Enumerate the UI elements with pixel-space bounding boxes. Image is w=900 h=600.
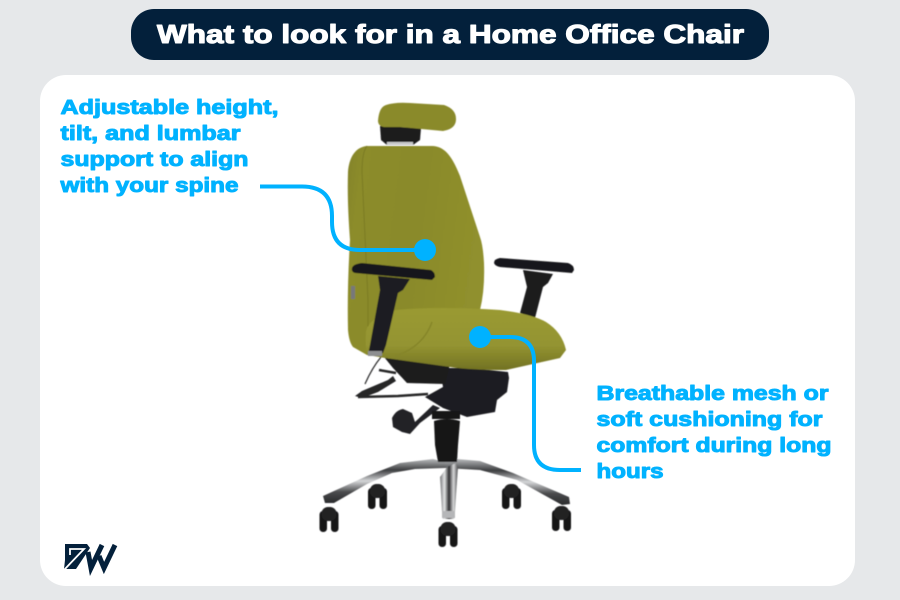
panel: chair card (40, 75, 855, 586)
title (131, 9, 769, 60)
text block: breathable comfort: comfort during long (596, 434, 832, 457)
text block: adjustable support: Adjustable height, (60, 96, 278, 119)
title: What to look for in a Home Office Chair (157, 19, 744, 49)
icon: seat mechanism (355, 352, 509, 434)
text block: adjustable support (59, 96, 279, 197)
icon: seat cushion (366, 308, 566, 370)
icon: far armrest (494, 258, 574, 318)
text block: breathable comfort: Breathable mesh or (596, 382, 829, 405)
icon: gas cylinder (434, 419, 460, 462)
text block: breathable comfort: soft cushioning for (596, 408, 823, 431)
icon: backrest (348, 146, 484, 355)
text block: adjustable support: tilt, and lumbar (60, 122, 241, 145)
text block: breathable comfort: hours (596, 460, 664, 483)
icon: headrest (378, 103, 456, 145)
text block: breathable comfort (596, 382, 832, 483)
chair photo illustration (320, 103, 574, 547)
icon: near armrest (351, 263, 435, 356)
icon: chair base (320, 459, 571, 547)
icon: logo (64, 544, 115, 570)
text block: adjustable support: with your spine (59, 174, 239, 197)
text block: adjustable support: support to align (60, 148, 248, 171)
arrow: connector to backrest (260, 186, 436, 261)
arrow: connector to seat (469, 326, 581, 470)
